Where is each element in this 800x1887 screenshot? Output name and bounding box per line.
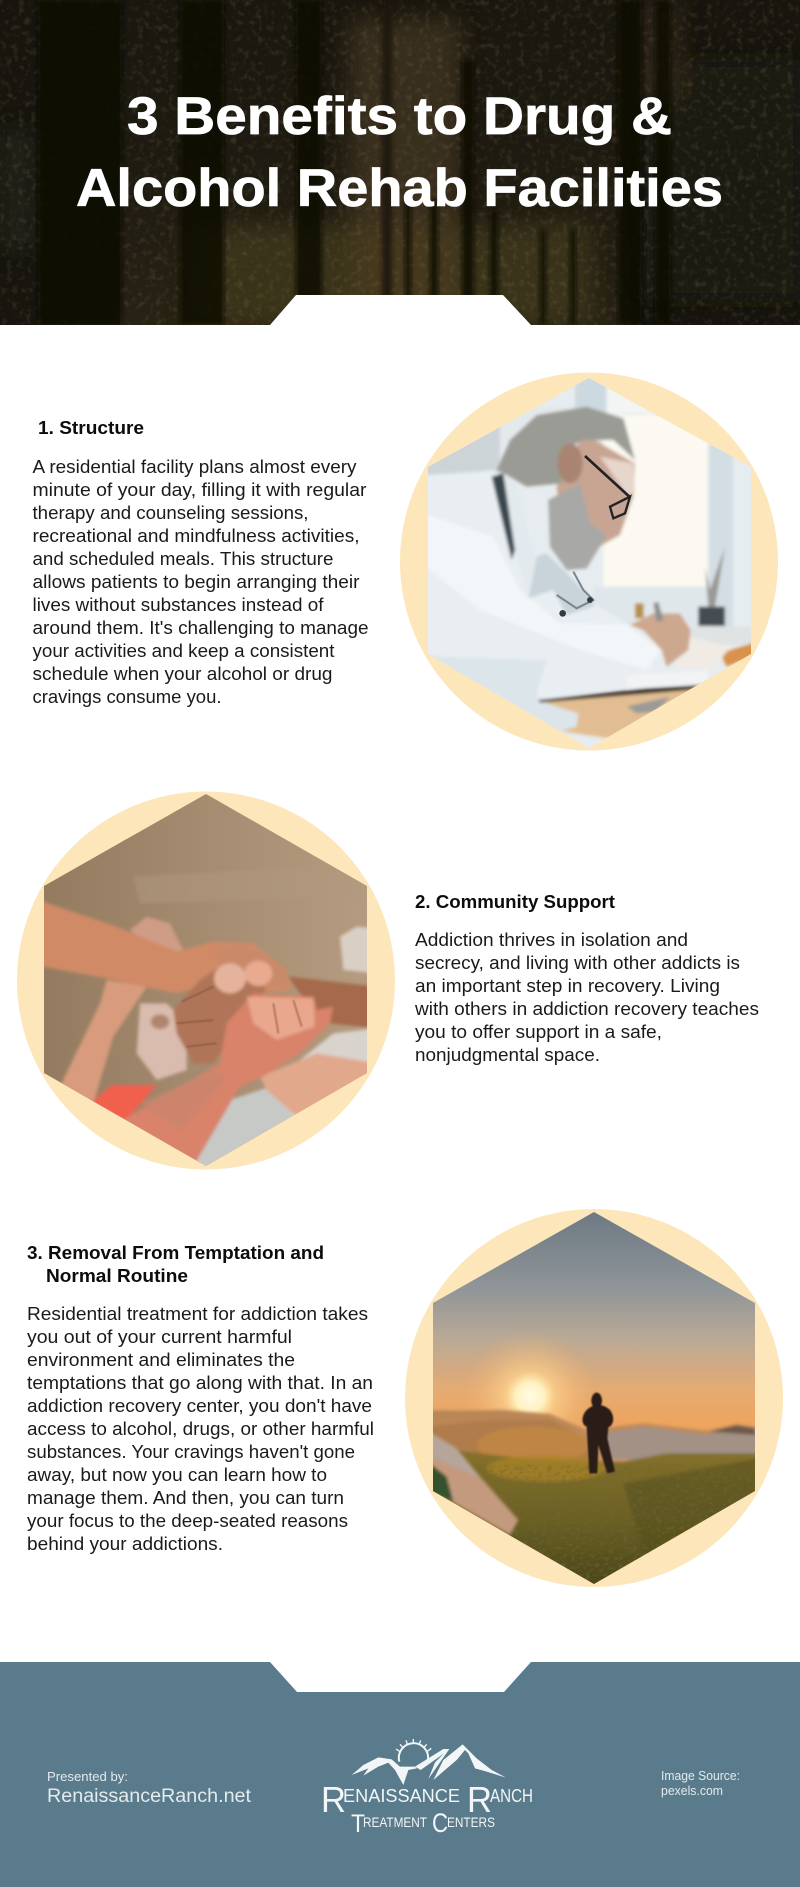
logo wordmark: ANCH	[490, 1786, 533, 1806]
body text: Structure: A residential facility plans almost every	[32, 457, 356, 477]
body text: Removal From Temptation: access to alcohol, drugs, or other harmful	[27, 1419, 374, 1439]
body text: Structure: minute of your day, filling it with regular	[32, 480, 366, 500]
logo wordmark: T	[351, 1810, 365, 1838]
body text: Removal From Temptation: temptations that go along with that. In an	[27, 1373, 373, 1393]
body text: Removal From Temptation: environment and eliminates the	[27, 1350, 295, 1370]
logo wordmark: R	[321, 1779, 346, 1820]
heading: 3. Removal From Temptation and Normal Routine: 3. Removal From Temptation and	[27, 1243, 324, 1263]
body text: Community Support: with others in addiction recovery teaches	[414, 999, 759, 1019]
image: doctor writing in hexagon on cream circle	[400, 372, 778, 760]
body text: Structure: allows patients to begin arranging their	[32, 572, 360, 592]
body text: Structure	[32, 457, 368, 707]
logo wordmark: ENAISSANCE	[343, 1786, 460, 1806]
body text: Structure: around them. It's challenging to manage	[32, 618, 368, 638]
body text: Removal From Temptation: substances. Your cravings haven't gone	[27, 1442, 355, 1462]
body text: Structure: therapy and counseling sessions,	[32, 503, 308, 523]
footer text: image source: Image Source:	[661, 1768, 740, 1783]
notch: hero bottom tab	[270, 295, 531, 325]
heading: 1. Structure: 1. Structure	[38, 418, 144, 438]
body text: Removal From Temptation: addiction recovery center, you don't have	[27, 1396, 372, 1416]
title: 3 Benefits to Drug &	[127, 87, 672, 146]
body text: Structure: your activities and keep a consistent	[32, 641, 334, 661]
heading: 3. Removal From Temptation and Normal Routine: Normal Routine	[46, 1266, 188, 1286]
logo wordmark	[321, 1779, 533, 1838]
section 2 text: Community Support	[414, 892, 759, 1065]
footer text: presented by: Presented by:	[47, 1769, 128, 1784]
footer text: image source: pexels.com	[661, 1783, 723, 1798]
logo wordmark: ENTERS	[447, 1814, 495, 1830]
body text: Community Support: you to offer support in a safe,	[415, 1022, 662, 1042]
body text: Removal From Temptation	[27, 1304, 374, 1554]
body text: Structure: schedule when your alcohol or drug	[32, 664, 332, 684]
body text: Removal From Temptation: Residential treatment for addiction takes	[27, 1304, 368, 1324]
section 3 text: Removal From Temptation	[27, 1243, 374, 1554]
body text: Structure: cravings consume you.	[32, 687, 222, 707]
body text: Removal From Temptation: behind your addictions.	[27, 1534, 223, 1554]
logo: Renaissance Ranch Treatment Centers	[321, 1739, 533, 1838]
footer text: presented by	[47, 1769, 252, 1807]
section 1 text: Structure	[32, 418, 368, 707]
body text: Community Support: Addiction thrives in isolation and	[415, 930, 688, 950]
body text: Removal From Temptation: you out of your current harmful	[27, 1327, 292, 1347]
logo wordmark: R	[467, 1779, 492, 1820]
body text: Community Support: secrecy, and living with other addicts is	[415, 953, 740, 973]
panel: forest hero banner	[0, 0, 800, 325]
body text: Community Support	[414, 930, 759, 1065]
body text: Structure: lives without substances instead of	[32, 595, 325, 615]
logo wordmark: REATMENT	[363, 1814, 427, 1830]
footer text: presented by: RenaissanceRanch.net	[47, 1786, 252, 1807]
body text: Community Support: nonjudgmental space.	[415, 1045, 600, 1065]
title	[76, 87, 723, 218]
image: sunrise hiker in hexagon on cream circle	[405, 1207, 783, 1595]
body text: Structure: recreational and mindfulness activities,	[32, 526, 360, 546]
body text: Removal From Temptation: away, but now you can learn how to	[27, 1465, 327, 1485]
body text: Community Support: an important step in recovery. Living	[415, 976, 720, 996]
footer text: image source	[661, 1768, 740, 1798]
body text: Removal From Temptation: your focus to the deep-seated reasons	[27, 1511, 348, 1531]
body text: Structure: and scheduled meals. This structure	[32, 549, 334, 569]
title: Alcohol Rehab Facilities	[76, 159, 723, 218]
logo wordmark: C	[432, 1808, 448, 1838]
heading: 2. Community Support: 2. Community Support	[415, 892, 615, 912]
panel: footer band	[0, 1662, 800, 1887]
icon: sun and mountains	[352, 1739, 506, 1785]
image: stacked hands in hexagon on cream circle	[17, 790, 395, 1173]
heading: 3. Removal From Temptation and Normal Routine	[27, 1243, 324, 1286]
body text: Removal From Temptation: manage them. And then, you can turn	[27, 1488, 344, 1508]
